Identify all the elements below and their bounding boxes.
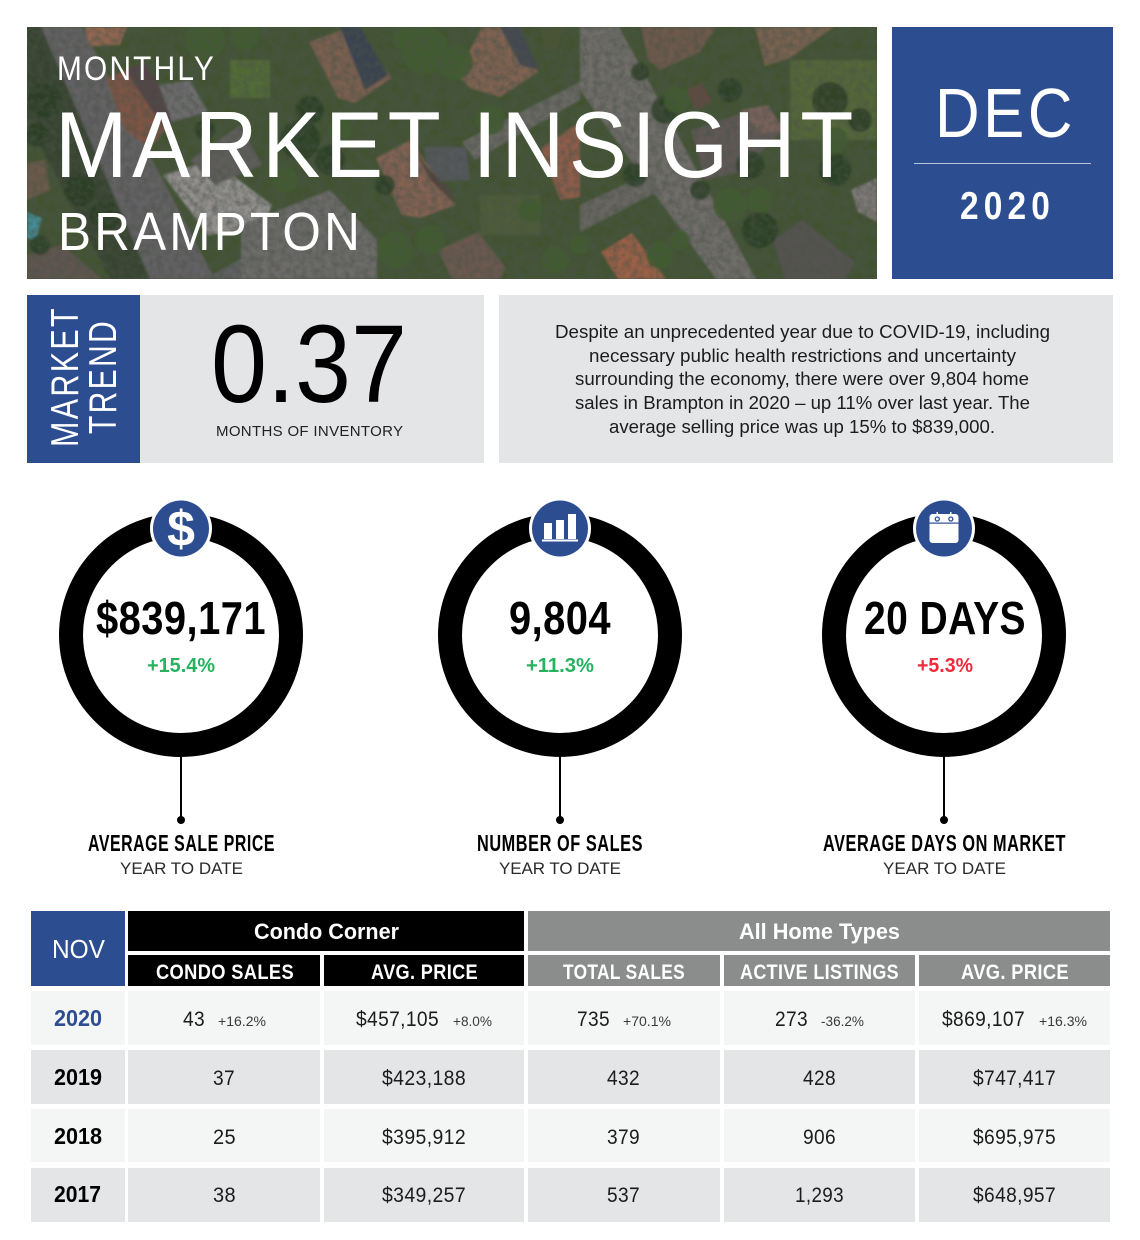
title: market insight: MARKET INSIGHT [55, 92, 858, 197]
row: 2017: 537 [607, 1184, 640, 1207]
value: 9,804 [509, 592, 611, 644]
row: 2020: +70.1% [623, 1013, 671, 1029]
panel: summary paragraph: average selling price was up 15% to $839,000. [609, 417, 995, 437]
row: 2020: 2020 [54, 1005, 102, 1031]
column header: active listings: ACTIVE LISTINGS [740, 961, 899, 984]
panel: summary paragraph: necessary public health restrictions and uncertainty [589, 346, 1016, 366]
icon: dollar: $ [167, 501, 195, 557]
row: 2020: +16.3% [1039, 1013, 1087, 1029]
connector [177, 757, 185, 824]
header: all home types [528, 911, 1110, 951]
column header: condo avg price: AVG. PRICE [371, 961, 478, 984]
aerial photo of neighbourhood [25, 20, 877, 279]
row: 2018: 906 [803, 1126, 836, 1149]
label: NUMBER OF SALES [477, 830, 643, 856]
column header: total sales: TOTAL SALES [563, 961, 685, 984]
header: NOV: NOV [52, 934, 106, 964]
row: 2017 [31, 1168, 1110, 1222]
row: 2019: 432 [607, 1067, 640, 1090]
row: 2019: $747,417 [973, 1067, 1056, 1090]
panel: market trend months of inventory [27, 295, 484, 463]
sublabel: YEAR TO DATE [120, 859, 243, 878]
month: DEC [935, 74, 1076, 152]
panel: summary paragraph: Despite an unprecedented year due to COVID-19, including [555, 322, 1050, 342]
panel: header aerial photo banner [25, 20, 877, 279]
change: +5.3% [917, 655, 973, 677]
header: condo corner [128, 911, 524, 951]
change: +11.3% [526, 655, 594, 677]
column header: active listings [724, 955, 915, 986]
column header: condo sales: CONDO SALES [156, 961, 294, 984]
row: 2018 [31, 1109, 1110, 1162]
column header: total sales [528, 955, 720, 986]
row: 2019 [31, 1050, 1110, 1104]
inventory value: 0.37 [211, 303, 407, 426]
market trend side label: MARKET [44, 306, 87, 447]
row: 2017: $648,957 [973, 1184, 1056, 1207]
row: 2020: 273 [775, 1008, 808, 1031]
year: 2020 [960, 185, 1055, 228]
row: 2019: 428 [803, 1067, 836, 1090]
row: 2018: $395,912 [382, 1126, 466, 1149]
title: brampton: BRAMPTON [58, 202, 363, 262]
row: 2018: 379 [607, 1126, 640, 1149]
stat: average sale price [71, 498, 291, 878]
icon: calendar [913, 498, 975, 560]
row: 2020: 735 [577, 1008, 610, 1031]
sublabel: YEAR TO DATE [499, 859, 621, 878]
panel: summary paragraph [499, 295, 1113, 463]
market trend side label: TREND [82, 319, 125, 434]
row: 2017: 38 [213, 1184, 236, 1207]
row: 2019: 2019 [54, 1064, 102, 1090]
column header: all types avg price [919, 955, 1110, 986]
icon: bar chart [529, 498, 591, 560]
row: 2018: $695,975 [973, 1126, 1056, 1149]
sublabel: YEAR TO DATE [883, 859, 1006, 878]
label: AVERAGE SALE PRICE [88, 830, 275, 856]
title: monthly: MONTHLY [57, 50, 216, 88]
row: 2020: -36.2% [821, 1013, 864, 1029]
donut ring [450, 525, 670, 745]
row: 2020: $869,107 [942, 1008, 1025, 1031]
row: 2019: 37 [213, 1067, 235, 1090]
stat: number of sales [450, 498, 670, 878]
row: 2020 [31, 991, 1110, 1045]
connector [940, 757, 948, 824]
table: November comparison [31, 911, 1110, 1222]
donut ring [71, 525, 291, 745]
header: all home types: All Home Types [739, 919, 900, 944]
column header: condo avg price [324, 955, 524, 986]
panel: date badge [892, 27, 1113, 279]
inventory caption: MONTHS OF INVENTORY [216, 423, 403, 440]
row: 2018: 25 [213, 1126, 236, 1149]
row: 2017: $349,257 [382, 1184, 466, 1207]
header: condo corner: Condo Corner [254, 919, 399, 944]
change: +15.4% [147, 655, 215, 677]
column header: all types avg price: AVG. PRICE [961, 961, 1069, 984]
icon: dollar [150, 498, 212, 560]
row: 2017: 1,293 [795, 1184, 844, 1207]
stat: average days on market [823, 498, 1066, 878]
row: 2019: $423,188 [382, 1067, 466, 1090]
header: NOV [31, 911, 125, 986]
value: 20 DAYS [864, 592, 1026, 644]
panel: summary paragraph: surrounding the economy, there were over 9,804 home [575, 369, 1029, 389]
panel: summary paragraph: sales in Brampton in 2020 – up 11% over last year. The [575, 393, 1030, 413]
row: 2018: 2018 [54, 1123, 102, 1149]
connector [556, 757, 564, 824]
row: 2020: +16.2% [218, 1013, 266, 1029]
donut ring [834, 525, 1054, 745]
row: 2020: 43 [183, 1008, 205, 1031]
market trend side label [27, 295, 140, 463]
column header: condo sales [128, 955, 320, 986]
value: $839,171 [96, 592, 266, 644]
row: 2017: 2017 [54, 1181, 101, 1207]
row: 2020: $457,105 [356, 1008, 439, 1031]
row: 2020: +8.0% [453, 1013, 492, 1029]
